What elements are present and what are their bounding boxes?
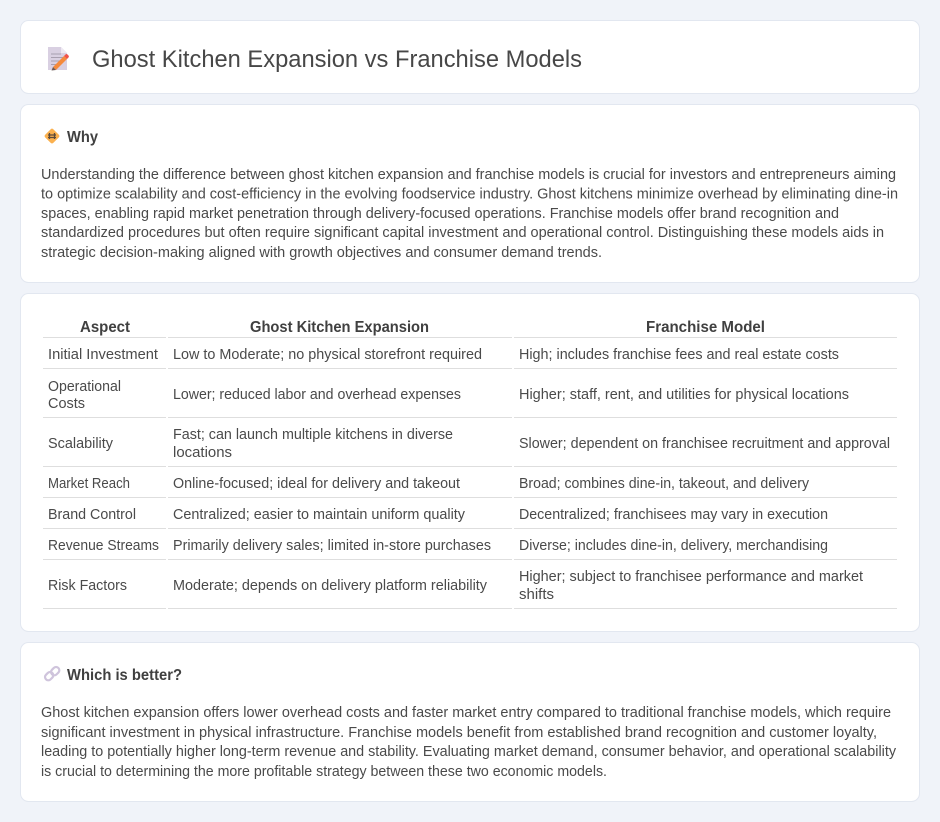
row: revenue streams — [48, 538, 828, 554]
row: brand control: Centralized; easier to maintain uniform quality — [173, 507, 466, 523]
row: risk factors: Higher; subject to franchisee performance and market — [519, 569, 863, 585]
row: brand control: Brand Control — [48, 507, 136, 523]
panel: comparison table — [20, 294, 920, 632]
text block: which is better paragraph: Ghost kitchen expansion offers lower overhead costs and faster market entry compared to traditional franchise models, which require — [41, 705, 891, 721]
row: market reach: Broad; combines dine-in, takeout, and delivery — [519, 476, 810, 492]
title: Ghost Kitchen Expansion vs Franchise Models — [92, 46, 582, 73]
row: risk factors: Moderate; depends on delivery platform reliability — [173, 578, 488, 594]
row: scalability: locations — [173, 445, 232, 461]
row: operational costs: Lower; reduced labor and overhead expenses — [173, 387, 461, 403]
row: scalability: Slower; dependent on franchisee recruitment and approval — [519, 436, 890, 452]
text block: why paragraph — [41, 167, 898, 261]
row: operational costs: Higher; staff, rent, and utilities for physical locations — [519, 387, 849, 403]
row: brand control: Decentralized; franchisees may vary in execution — [519, 507, 828, 523]
text block: which is better paragraph: significant investment in physical infrastructure. Franchise models benefit from established brand recognition and customer loyalty, — [41, 725, 877, 741]
text block: which is better paragraph — [41, 705, 897, 780]
text block: why paragraph: standardized procedures but often require significant capital investment and operational control. Distinguishing these models aids in — [41, 225, 884, 241]
row: revenue streams: Primarily delivery sales; limited in-store purchases — [173, 538, 491, 554]
row: operational costs — [48, 379, 849, 412]
row: operational costs: Costs — [48, 396, 85, 412]
table header row: Franchise Model — [646, 319, 765, 336]
table header row: Aspect — [80, 319, 131, 336]
heading: which is better: Which is better? — [67, 667, 182, 684]
icon: orange diamond sign — [44, 128, 60, 144]
panel: why — [20, 104, 920, 282]
row: initial investment: Low to Moderate; no physical storefront required — [173, 347, 482, 363]
row: revenue streams: Revenue Streams — [48, 538, 159, 554]
text block: why paragraph: spaces, enabling rapid market penetration through delivery-focused operations. Franchise models offer brand recognition and — [41, 206, 839, 222]
table header row — [80, 319, 765, 336]
text block: which is better paragraph: leading to potentially higher long-term revenue and stability. Evaluating market demand, consumer behavior, and operational scalability — [41, 744, 897, 760]
row: brand control — [48, 507, 828, 523]
row: market reach: Online-focused; ideal for delivery and takeout — [173, 476, 460, 492]
table header row: Ghost Kitchen Expansion — [250, 319, 429, 336]
row: market reach: Market Reach — [48, 476, 130, 492]
text block: why paragraph: Understanding the difference between ghost kitchen expansion and franchise models is crucial for investors and entrepreneurs aiming — [41, 167, 896, 183]
panel: which is better — [20, 642, 920, 802]
icon: chain link — [44, 666, 61, 682]
text block: which is better paragraph: is crucial to determining the more profitable strategy between these two economic models. — [41, 764, 607, 780]
text block: why paragraph: strategic decision-making aligned with growth objectives and consumer demand trends. — [41, 245, 602, 261]
row: scalability: Scalability — [48, 436, 114, 452]
row: risk factors: Risk Factors — [48, 578, 127, 594]
panel: header — [20, 20, 920, 94]
text block: why paragraph: to optimize scalability and cost-efficiency in the evolving foodservice industry. Ghost kitchens minimize overhead by eliminating dine-in — [41, 186, 898, 202]
row: revenue streams: Diverse; includes dine-in, delivery, merchandising — [519, 538, 828, 554]
row: operational costs: Operational — [48, 379, 121, 395]
row: initial investment: Initial Investment — [48, 347, 158, 363]
row: initial investment: High; includes franchise fees and real estate costs — [519, 347, 839, 363]
row: market reach — [48, 476, 810, 492]
icon: document with pencil — [48, 47, 69, 70]
row: scalability: Fast; can launch multiple kitchens in diverse — [173, 427, 453, 443]
row: risk factors: shifts — [519, 587, 554, 603]
table grid lines — [43, 338, 897, 608]
row: scalability — [48, 427, 890, 461]
row: risk factors — [48, 569, 863, 603]
heading: why: Why — [67, 129, 98, 146]
row: initial investment — [48, 347, 839, 363]
